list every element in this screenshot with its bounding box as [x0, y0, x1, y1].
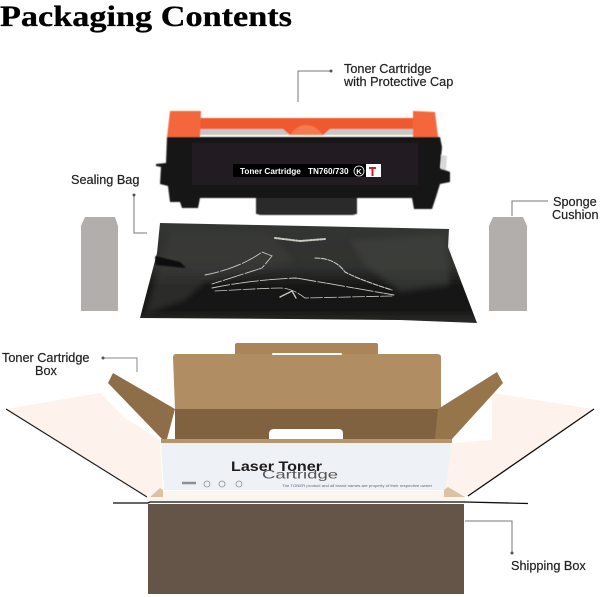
icon: toner cartridge: [156, 111, 450, 215]
icon: shipping box: [113, 487, 528, 594]
title: Packaging Contents: [0, 0, 292, 33]
callout: toner cartridge box: Box: [35, 364, 58, 378]
callout: toner cartridge with protective cap: Toner Cartridge: [344, 62, 431, 76]
callout: shipping box: Shipping Box: [511, 559, 586, 573]
front handle notch: [269, 429, 343, 440]
left side flap: [108, 373, 175, 439]
protective cap left block: [167, 111, 201, 137]
callout: sponge cushion: [512, 195, 599, 222]
callout: toner cartridge with protective cap: with Protective Cap: [343, 75, 453, 89]
callout: sponge cushion: Sponge: [553, 195, 597, 209]
protective cap right block: [413, 111, 438, 137]
icon: sealing bag: [140, 223, 477, 323]
callout: toner cartridge with protective cap: [298, 62, 453, 102]
shipping box opening edge: [113, 502, 528, 504]
cartridge side clip: [441, 155, 447, 170]
callout: toner cartridge box: [2, 351, 137, 378]
icon: toner cartridge box: Cartridge: [262, 468, 338, 482]
back lid tab: [235, 343, 378, 355]
shipping box opening rim: [147, 491, 465, 502]
cartridge label: TN760/730: [308, 167, 349, 176]
right inner corner: [444, 487, 465, 497]
icon: left sponge cushion: [81, 217, 118, 311]
right flap edge: [468, 409, 594, 496]
box front panel: [161, 443, 452, 490]
callout: sealing bag: Sealing Bag: [71, 173, 139, 187]
cartridge label: K: [356, 167, 362, 176]
callout: sealing bag: [71, 173, 147, 233]
cartridge tray: [256, 198, 357, 215]
inner back wall: [175, 409, 440, 440]
right outer flap: [443, 393, 593, 496]
icon: toner cartridge box: [6, 343, 594, 497]
callout: shipping box: [465, 521, 586, 573]
cartridge label: [233, 164, 381, 177]
shipping box front: [148, 504, 464, 594]
left inner corner: [150, 488, 163, 497]
callout: toner cartridge box: Toner Cartridge: [2, 351, 89, 365]
cartridge body: [156, 137, 450, 214]
left flap edge: [6, 409, 147, 497]
protective cap tab: [290, 125, 323, 135]
box name: Laser Toner: [231, 459, 323, 474]
lid slot: [272, 353, 342, 355]
protective cap strip: [200, 129, 413, 135]
callout: sponge cushion: Cushion: [552, 208, 599, 222]
cartridge shading: [192, 143, 418, 185]
icon: right sponge cushion: [489, 217, 527, 311]
left outer flap: [6, 393, 163, 497]
back lid: [173, 354, 441, 409]
right side flap: [435, 372, 503, 439]
box fine print: The TONER product and all brand names are property of their respective owner: [282, 483, 433, 488]
cartridge label: Toner Cartridge: [240, 167, 301, 176]
protective cap bar: [200, 118, 413, 135]
front rim: [161, 439, 452, 443]
box icons: [182, 481, 242, 487]
